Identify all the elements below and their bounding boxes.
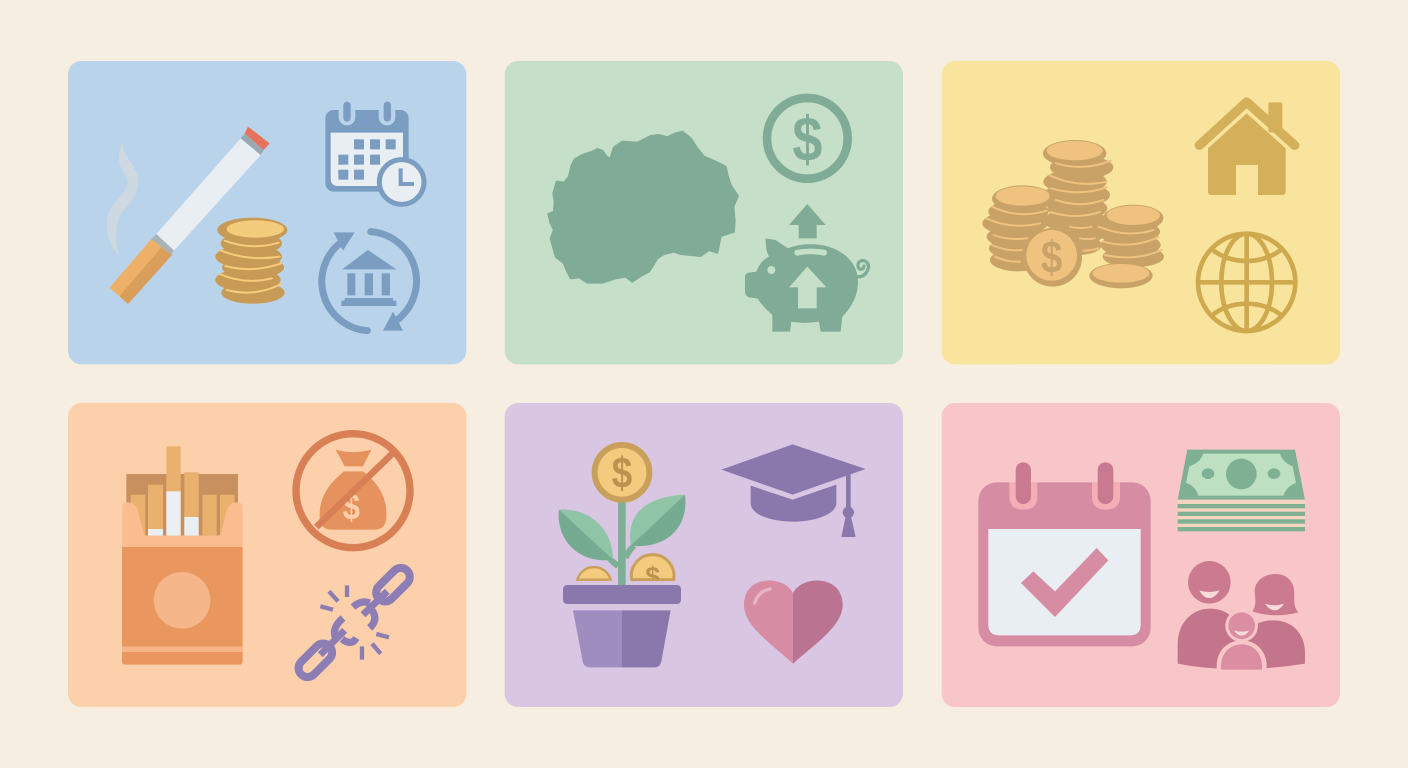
icon: coin stack [215, 218, 287, 304]
icon: coin piles [982, 140, 1164, 288]
icon: coin piles: $ [1041, 231, 1062, 282]
icon: piggy bank [745, 238, 868, 332]
icon: house [1199, 102, 1295, 195]
panel: cigarette costs [68, 61, 466, 364]
icon: graduation cap [721, 444, 866, 537]
icon: heart [744, 580, 843, 664]
icon: dollar coin: $ [792, 105, 822, 175]
panel: calendar, cash and family [942, 403, 1340, 707]
icon: stack of banknotes [1178, 450, 1305, 531]
icon: no money bag: $ [343, 487, 360, 528]
icon: cigarette [110, 127, 270, 304]
icon: money plant: $ [612, 449, 632, 498]
icon: no money bag [296, 434, 410, 548]
panel: cigarette pack and broken chain [68, 403, 466, 707]
icon: calendar with clock [325, 99, 424, 204]
icon: broken chain [295, 564, 414, 681]
icon: cigarette pack [122, 446, 243, 665]
icon: smoke [107, 140, 138, 255]
icon: dollar coin [767, 98, 848, 179]
panel: investment, education and health [505, 403, 903, 707]
icon: bank with cycle arrows [322, 232, 417, 331]
panel: coins, home and globe [942, 61, 1340, 364]
panel: country and savings [505, 61, 903, 364]
icon: country map silhouette [548, 132, 738, 283]
icon: globe [1198, 234, 1295, 331]
icon: money plant: $ [645, 561, 660, 591]
icon: calendar with check [978, 462, 1151, 646]
icon: up arrow [789, 204, 826, 238]
icon: family [1178, 561, 1305, 670]
icon: money plant [559, 445, 685, 667]
